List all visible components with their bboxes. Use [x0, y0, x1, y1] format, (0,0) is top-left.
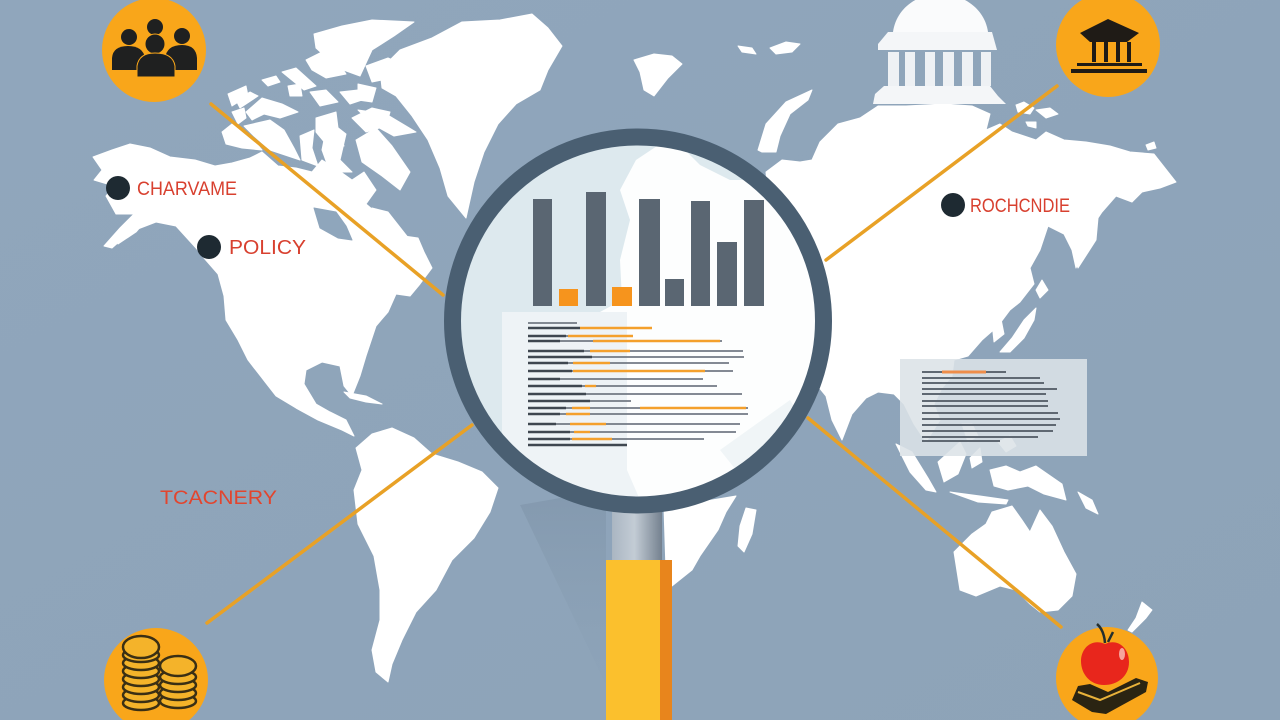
- dome: [893, 0, 988, 32]
- lens map reflection: [461, 146, 793, 496]
- bottom-right icon: apple on books: [1056, 624, 1158, 720]
- map: Southeast Asia: [896, 444, 936, 492]
- apple stem: [1097, 624, 1113, 643]
- entablature: [878, 32, 997, 50]
- map: Hudson Bay (water cut): [314, 208, 352, 240]
- top-right icon: institution: [1056, 0, 1160, 97]
- connector: top left: [211, 104, 443, 295]
- label: charvame: [106, 176, 237, 200]
- map: Eurasia: [766, 104, 1176, 442]
- handle neck: [612, 508, 662, 562]
- columns: [888, 52, 991, 86]
- label: charvame: CHARVAME: [137, 179, 237, 200]
- map: Scandinavia: [758, 90, 812, 152]
- connector: bottom left: [207, 425, 472, 623]
- map: Kamchatka: [1074, 218, 1098, 268]
- handle edge: [660, 560, 672, 720]
- map: Madagascar: [738, 508, 756, 552]
- bottom-left icon: coins: [104, 628, 208, 720]
- handle shadow: [520, 490, 606, 685]
- capitol building illustration: [873, 0, 1006, 104]
- document panel on map: [900, 359, 1087, 456]
- label: policy: POLICY: [229, 237, 306, 259]
- world map: [93, 14, 1176, 682]
- map: Greenland: [380, 14, 562, 218]
- map: Caribbean islands: [344, 392, 382, 404]
- map: Australia: [954, 506, 1076, 612]
- connector lines: [207, 86, 1061, 627]
- map: Japan: [1000, 308, 1036, 352]
- map: Iceland: [634, 54, 682, 96]
- map: Korea: [992, 314, 1004, 342]
- map: Africa: [664, 496, 736, 586]
- lens: [450, 137, 824, 520]
- base: [873, 86, 1006, 104]
- map: Arctic islands: [222, 20, 426, 262]
- label: rochcndie: ROCHCNDIE: [970, 196, 1070, 217]
- top-left icon: people: [102, 0, 206, 102]
- lens ring: [452, 137, 824, 505]
- map: South America: [354, 428, 498, 682]
- map: Alaska peninsula: [118, 218, 148, 244]
- handle grip: [606, 560, 672, 720]
- connector: bottom right: [808, 418, 1061, 627]
- map: New Zealand: [1128, 602, 1152, 632]
- lens glass: [460, 145, 816, 497]
- document text lines in lens: [528, 323, 748, 445]
- bar chart: [533, 192, 764, 306]
- label: policy: [197, 235, 306, 259]
- map: Novaya Zemlya islands: [1016, 102, 1034, 114]
- books: [1072, 678, 1148, 714]
- apple: [1081, 642, 1129, 685]
- magnifying glass handle: [606, 508, 672, 720]
- label: tcacnery: TCACNERY: [160, 488, 277, 509]
- map: Svalbard: [770, 42, 800, 54]
- map: North America: [93, 144, 432, 436]
- label: rochcndie: [941, 193, 1070, 217]
- connector: top right: [826, 86, 1057, 260]
